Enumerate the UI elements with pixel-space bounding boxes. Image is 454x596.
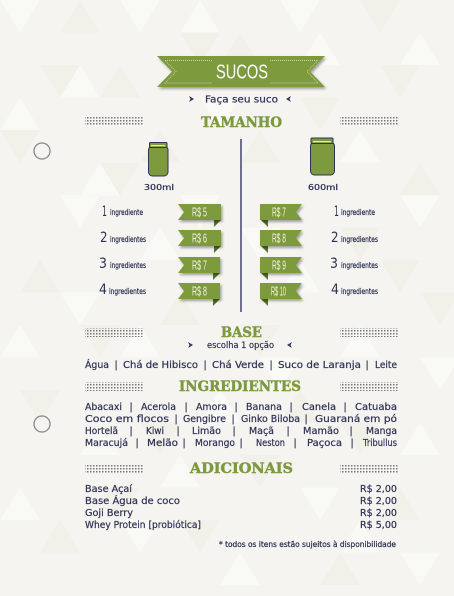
row: 2 ingredientes 300ml: 2	[100, 230, 108, 246]
base options list: Chá de Hibisco	[123, 360, 198, 371]
ingredients list: |	[234, 402, 238, 413]
ingredients list	[85, 402, 397, 449]
ingredients list: Amora	[196, 402, 227, 413]
row: 2 ingredientes 600ml: R$ 8	[272, 230, 286, 246]
ingredients list: Catuaba	[355, 402, 397, 413]
additions price list: Whey Protein [probiótica]	[85, 520, 201, 531]
binder hole bottom	[34, 416, 50, 432]
ingredients list: |	[286, 426, 290, 437]
heading: ingredientes	[85, 379, 398, 395]
ingredients list: |	[130, 426, 133, 437]
additions price list: R$ 2,00	[360, 496, 397, 507]
heading: tamanho	[85, 115, 398, 131]
row: 4 ingredientes 300ml: 4	[99, 282, 107, 298]
jar 600ml: 600ml	[308, 183, 338, 192]
ingredients list: Melão	[147, 438, 178, 449]
ingredients list: Guaraná em pó	[315, 414, 397, 425]
additions price list	[85, 484, 397, 531]
ingredients list: Maçã	[249, 426, 274, 437]
row: 1 ingrediente 600ml: ingrediente	[341, 208, 375, 217]
additions price list: R$ 5,00	[360, 520, 397, 531]
row: 3 ingredientes 300ml	[99, 256, 220, 280]
jar 600ml	[308, 138, 338, 192]
600ml price list	[260, 204, 378, 306]
base options list	[85, 359, 397, 371]
ingredients list: |	[136, 438, 139, 449]
row: 2 ingredientes 300ml	[100, 230, 221, 253]
row: 4 ingredientes 300ml: ingredientes	[109, 287, 146, 296]
row: 1 ingrediente 600ml	[260, 204, 375, 227]
row: 4 ingredientes 300ml: R$ 8	[192, 284, 207, 298]
ingredients list: Morango	[195, 438, 235, 449]
title ribbon	[157, 56, 325, 87]
ingredients list: |	[344, 402, 347, 413]
title ribbon: SUCOS	[216, 62, 268, 84]
row: 4 ingredientes 300ml	[99, 282, 220, 306]
subtitle: faça seu suco: Faça seu suco	[205, 94, 278, 106]
row: 4 ingredientes 600ml: R$ 10	[271, 284, 286, 298]
base options list: Suco de Laranja	[278, 360, 361, 371]
row: 1 ingrediente 600ml: 1	[334, 204, 339, 220]
ingredients list: Hortelã	[85, 426, 118, 437]
base options list: |	[270, 360, 273, 371]
row: 3 ingredientes 300ml: R$ 7	[192, 258, 207, 272]
ingredients list: |	[294, 438, 297, 449]
heading: base: BASE	[221, 325, 262, 341]
row: 3 ingredientes 600ml	[260, 256, 378, 280]
ingredients list: Acerola	[141, 402, 176, 413]
additions price list: Base Água de coco	[85, 495, 180, 507]
ingredients list: Kiwi	[146, 426, 164, 437]
row: 3 ingredientes 600ml: 3	[330, 256, 338, 272]
additions price list: Base Açaí	[85, 484, 132, 495]
ingredients list: |	[232, 426, 236, 437]
subtitle: escolha 1 opção: escolha 1 opção	[207, 341, 274, 351]
base options list: |	[366, 360, 369, 371]
additions price list: Goji Berry	[85, 508, 133, 519]
heading: ingredientes: INGREDIENTES	[179, 379, 301, 395]
ingredients list: Tribullus	[362, 438, 397, 449]
vertical divider	[240, 139, 242, 312]
heading: adicionais	[85, 461, 398, 477]
base options list: |	[114, 360, 118, 371]
ingredients list: Mamão	[303, 426, 339, 437]
row: 2 ingredientes 600ml: ingredientes	[341, 235, 378, 244]
ingredients list: Coco em flocos	[85, 414, 169, 425]
ingredients list: |	[176, 426, 180, 437]
row: 1 ingrediente 600ml: R$ 7	[272, 204, 286, 220]
ingredients list: |	[240, 438, 243, 449]
subtitle: faça seu suco	[189, 94, 291, 106]
ingredients list: |	[290, 402, 293, 413]
ingredients list: |	[174, 414, 178, 425]
row: 2 ingredientes 300ml: R$ 6	[192, 230, 207, 246]
footnote: * todos os itens estão sujeitos à disponibilidade	[219, 540, 396, 549]
heading: base	[85, 325, 398, 341]
subtitle: escolha 1 opção	[188, 341, 292, 351]
row: 3 ingredientes 300ml: ingredientes	[110, 261, 146, 270]
row: 2 ingredientes 300ml: ingredientes	[110, 235, 146, 244]
jar 300ml: 300ml	[144, 183, 174, 192]
additions price list: R$ 2,00	[360, 484, 397, 495]
ingredients list: Limão	[192, 426, 221, 437]
row: 4 ingredientes 600ml: ingredientes	[341, 287, 378, 296]
ingredients list: Maracujá	[85, 438, 128, 449]
row: 1 ingrediente 300ml	[102, 204, 221, 227]
base options list: Água	[85, 359, 109, 371]
ingredients list: Canela	[302, 402, 336, 413]
ingredients list: Abacaxi	[85, 402, 122, 413]
row: 4 ingredientes 600ml	[260, 282, 378, 306]
row: 3 ingredientes 600ml: ingredientes	[341, 261, 378, 270]
row: 1 ingrediente 300ml: ingrediente	[110, 208, 143, 217]
row: 3 ingredientes 600ml: R$ 9	[272, 258, 286, 272]
ingredients list: Ginko Biloba	[241, 414, 300, 425]
row: 2 ingredientes 600ml	[260, 230, 378, 253]
ingredients list: Paçoca	[307, 438, 342, 449]
row: 4 ingredientes 600ml: 4	[331, 282, 339, 298]
base options list: |	[204, 360, 207, 371]
heading: tamanho: TAMANHO	[201, 115, 282, 131]
additions price list: R$ 2,00	[360, 508, 397, 519]
row: 3 ingredientes 300ml: 3	[99, 256, 107, 272]
ingredients list: Banana	[246, 402, 282, 413]
ingredients list: Gengibre	[183, 414, 226, 425]
ingredients list: Manga	[366, 426, 397, 437]
ingredients list: |	[350, 438, 354, 449]
heading: adicionais: ADICIONAIS	[189, 461, 293, 477]
jar 300ml	[144, 142, 174, 192]
row: 1 ingrediente 300ml: R$ 5	[192, 204, 207, 220]
ingredients list: |	[232, 414, 235, 425]
ingredients list: |	[184, 402, 188, 413]
ingredients list: Neston	[256, 438, 285, 449]
row: 2 ingredientes 600ml: 2	[331, 230, 338, 246]
ingredients list: |	[182, 438, 186, 449]
ingredients list: |	[130, 402, 133, 413]
ingredients list: |	[350, 426, 353, 437]
300ml price list	[99, 204, 221, 306]
base options list: Leite	[375, 360, 397, 371]
ingredients list: |	[304, 414, 308, 425]
row: 1 ingrediente 300ml: 1	[102, 204, 107, 220]
base options list: Chá Verde	[212, 360, 264, 371]
binder hole top	[34, 143, 50, 159]
